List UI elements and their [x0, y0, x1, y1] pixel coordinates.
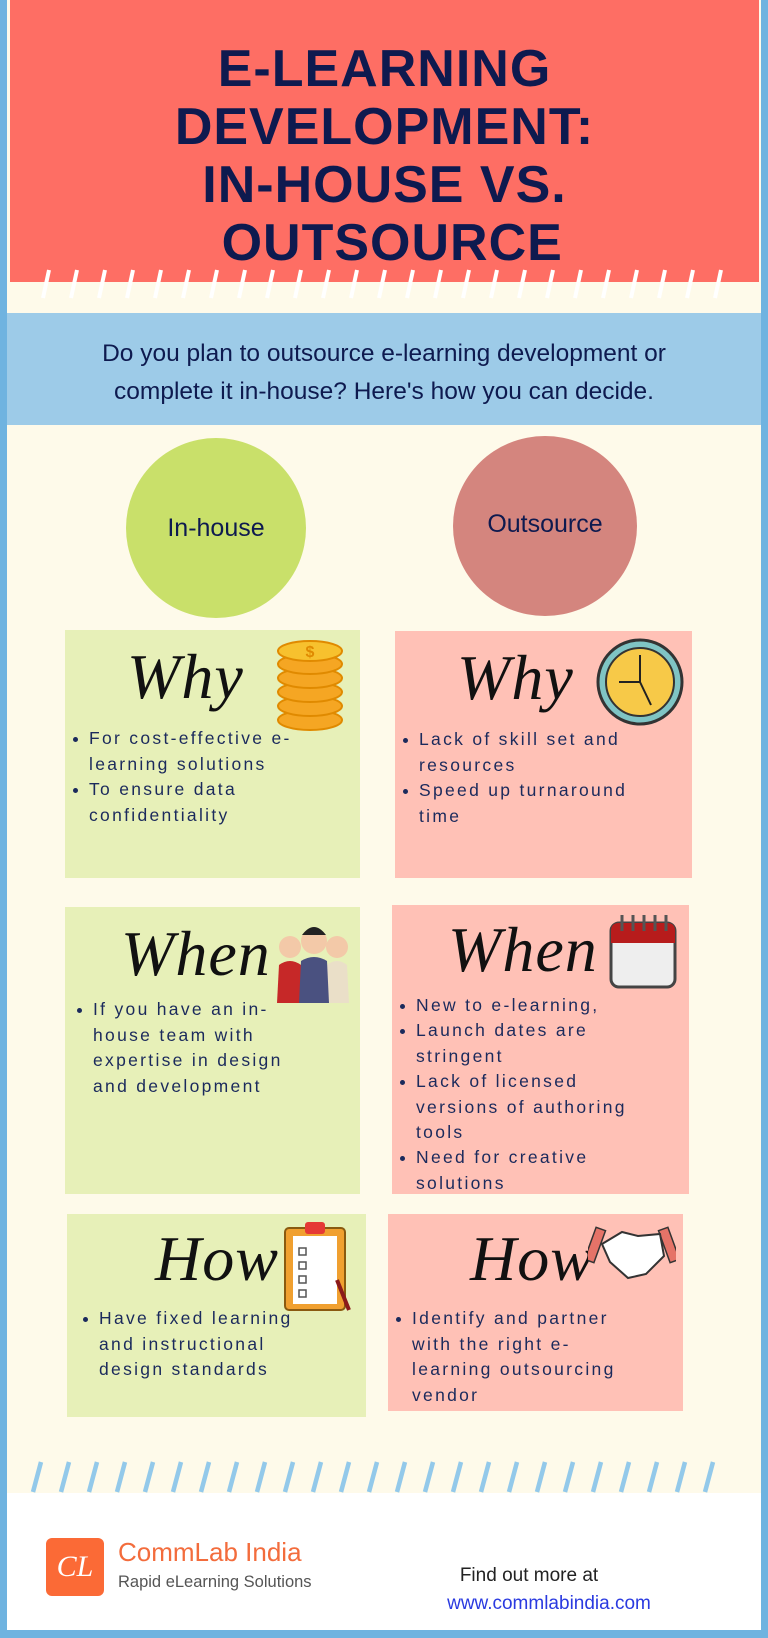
bullets	[73, 728, 292, 825]
panel: in-house why	[65, 630, 360, 878]
heading how: How	[470, 1223, 594, 1294]
bullets: Have fixed learning	[99, 1308, 293, 1328]
intro text: complete it in-house? Here's how you can decide.	[114, 378, 654, 405]
title: DEVELOPMENT:	[175, 98, 594, 156]
bullets: learning outsourcing	[412, 1359, 616, 1379]
intro text	[102, 340, 666, 405]
bullets: stringent	[416, 1046, 504, 1066]
footer	[7, 1493, 761, 1630]
icon: coins: $	[306, 644, 315, 661]
circle: in-house	[126, 438, 306, 618]
panel: in-house when	[65, 907, 360, 1194]
circle: in-house: In-house	[167, 514, 265, 542]
title: OUTSOURCE	[222, 214, 563, 272]
bullets: Need for creative	[416, 1147, 588, 1167]
bullets: For cost-effective e-	[89, 728, 292, 748]
bullets: with the right e-	[412, 1334, 571, 1354]
bullets: New to e-learning,	[416, 995, 599, 1015]
bullets: learning solutions	[89, 754, 267, 774]
bullets: house team with	[93, 1025, 255, 1045]
bullets: design standards	[99, 1359, 269, 1379]
bullets	[403, 729, 627, 826]
heading when: When	[121, 918, 271, 989]
heading why: Why	[127, 641, 244, 712]
circle: outsource	[453, 436, 637, 616]
bullets: Lack of licensed	[416, 1071, 578, 1091]
bullets: To ensure data	[89, 779, 237, 799]
title: IN-HOUSE VS.	[202, 156, 567, 214]
title	[175, 40, 594, 272]
bullets: resources	[419, 755, 517, 775]
title: E-LEARNING	[218, 40, 551, 98]
logo icon	[46, 1538, 104, 1596]
intro text: Do you plan to outsource e-learning development or	[102, 340, 666, 367]
bullets: If you have an in-	[93, 999, 269, 1019]
bullets: tools	[416, 1122, 464, 1142]
bullets: confidentiality	[89, 805, 230, 825]
intro band	[7, 313, 761, 425]
footer: Rapid eLearning Solutions	[118, 1573, 312, 1591]
icon: clock	[596, 638, 684, 726]
footer: www.commlabindia.com	[447, 1593, 651, 1614]
white slashes	[41, 270, 723, 298]
heading why: Why	[457, 642, 574, 713]
bullets: Identify and partner	[412, 1308, 609, 1328]
icon: team	[277, 927, 349, 1003]
bullets	[400, 995, 627, 1193]
bullets: expertise in design	[93, 1050, 283, 1070]
circle: outsource: Outsource	[487, 510, 603, 538]
bullets: Launch dates are	[416, 1020, 588, 1040]
header red	[10, 0, 759, 282]
bullets: time	[419, 806, 461, 826]
panel: outsource why	[395, 631, 692, 878]
bullets: vendor	[412, 1385, 479, 1405]
find out more: Find out more at	[460, 1565, 598, 1586]
icon: calendar	[610, 915, 676, 988]
logo icon: CL	[57, 1550, 93, 1583]
bullets: Speed up turnaround	[419, 780, 627, 800]
blue slashes	[30, 1461, 716, 1493]
bullets	[77, 999, 283, 1096]
panel: outsource when	[392, 905, 689, 1194]
heading how: How	[155, 1223, 279, 1294]
bullets: and instructional	[99, 1334, 266, 1354]
logo text: CommLab India	[118, 1537, 302, 1567]
bullets: and development	[93, 1076, 262, 1096]
icon: handshake	[588, 1226, 676, 1280]
bullets	[83, 1308, 293, 1379]
panel: outsource how	[388, 1214, 683, 1411]
bullets: versions of authoring	[416, 1097, 627, 1117]
bullets: solutions	[416, 1173, 506, 1193]
icon: checklist	[284, 1222, 351, 1311]
bullets: Lack of skill set and	[419, 729, 620, 749]
icon: coins	[277, 640, 343, 731]
heading when: When	[448, 914, 598, 985]
bullets	[396, 1308, 616, 1405]
panel: in-house how	[67, 1214, 366, 1417]
